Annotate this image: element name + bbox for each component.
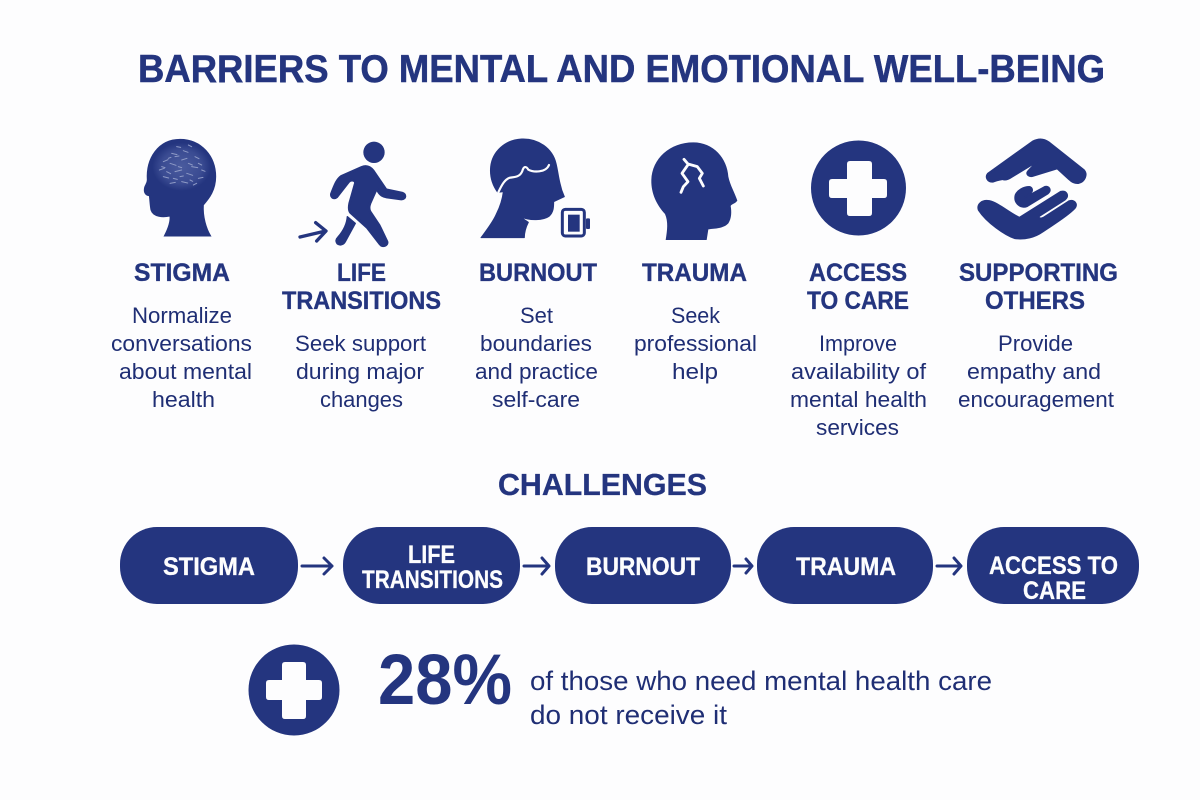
heading: supporting others: [959, 259, 1118, 315]
text: life transitions advice: [295, 331, 426, 412]
heading: access to care: [807, 259, 909, 315]
panel: trauma: [634, 142, 757, 384]
pill: life transitions: [343, 527, 520, 604]
text: stigma advice: [111, 303, 252, 412]
heading: life transitions: [282, 259, 441, 315]
icon: head with lightning crack: [651, 142, 737, 240]
arrow: trauma to access to care: [937, 558, 961, 574]
panel: access to care: [790, 140, 927, 440]
text: life transitions advice: changes: [320, 387, 403, 412]
arrow: stigma to life transitions: [302, 558, 332, 574]
pill: life transitions: LIFE: [408, 541, 455, 569]
icon: medical cross in circle: [248, 644, 340, 736]
heading: trauma: TRAUMA: [642, 259, 747, 287]
text: access to care advice: availability of: [791, 359, 927, 384]
text: access to care advice: services: [816, 415, 899, 440]
panel: supporting others: [958, 140, 1118, 412]
text: stigma advice: about mental: [119, 359, 252, 384]
text: burnout advice: and practice: [475, 359, 598, 384]
heading: supporting others: SUPPORTING: [959, 259, 1118, 287]
pill: trauma: TRAUMA: [796, 553, 896, 581]
flow: challenge sequence: [120, 527, 1139, 605]
text: stigma advice: conversations: [111, 331, 252, 356]
text: stigma advice: health: [152, 387, 215, 412]
pill: stigma: STIGMA: [163, 553, 255, 581]
pill: access to care: CARE: [1023, 577, 1086, 605]
heading: access to care: ACCESS: [809, 259, 907, 287]
statistic callout: [248, 641, 992, 736]
icon: head with textured brain: [144, 139, 216, 236]
text: stigma advice: Normalize: [132, 303, 232, 328]
text: burnout advice: boundaries: [480, 331, 592, 356]
pill: access to care: ACCESS TO: [989, 552, 1118, 580]
text: statistic description: of those who need mental health care: [530, 666, 992, 696]
text: supporting others advice: Provide: [998, 331, 1073, 356]
heading: life transitions: TRANSITIONS: [282, 287, 441, 315]
text: life transitions advice: during major: [296, 359, 424, 384]
text: trauma advice: help: [672, 359, 718, 384]
title: BARRIERS TO MENTAL AND EMOTIONAL WELL-BEING: [138, 48, 1105, 91]
pill: burnout: [555, 527, 731, 604]
text: supporting others advice: empathy and: [967, 359, 1101, 384]
pill: burnout: BURNOUT: [586, 553, 700, 581]
heading: access to care: TO CARE: [807, 287, 909, 315]
statistic: 28%: 28%: [378, 641, 512, 720]
heading: life transitions: LIFE: [337, 259, 386, 287]
text: burnout advice: self-care: [492, 387, 580, 412]
pill: stigma: [120, 527, 298, 604]
text: burnout advice: Set: [520, 303, 553, 328]
icon: head profile with crack and low battery: [481, 139, 590, 238]
heading: supporting others: OTHERS: [985, 287, 1085, 315]
icon: medical cross in circle: [811, 140, 906, 236]
text: access to care advice: mental health: [790, 387, 927, 412]
icon: walking figure with arrow: [300, 142, 405, 246]
pill: access to care: [967, 527, 1139, 605]
pill: life transitions: TRANSITIONS: [362, 566, 503, 594]
arrow: burnout to trauma: [734, 559, 752, 573]
text: statistic description: [530, 666, 992, 730]
text: trauma advice: Seek: [671, 303, 721, 328]
text: burnout advice: [475, 303, 598, 412]
text: access to care advice: [790, 331, 927, 440]
icon: helping hands: [978, 140, 1086, 239]
panel: life transitions: [282, 142, 441, 412]
text: supporting others advice: encouragement: [958, 387, 1114, 412]
panel: stigma: [111, 139, 252, 412]
heading: stigma: STIGMA: [134, 259, 230, 287]
text: trauma advice: [634, 303, 757, 384]
text: life transitions advice: Seek support: [295, 331, 426, 356]
arrow: life transitions to burnout: [524, 558, 549, 574]
heading: challenges: CHALLENGES: [498, 467, 707, 502]
pill: trauma: [757, 527, 933, 604]
panel: burnout: [475, 139, 598, 412]
text: supporting others advice: [958, 331, 1114, 412]
text: access to care advice: Improve: [819, 331, 897, 356]
heading: burnout: BURNOUT: [479, 259, 597, 287]
text: statistic description: do not receive it: [530, 700, 728, 730]
text: trauma advice: professional: [634, 331, 757, 356]
